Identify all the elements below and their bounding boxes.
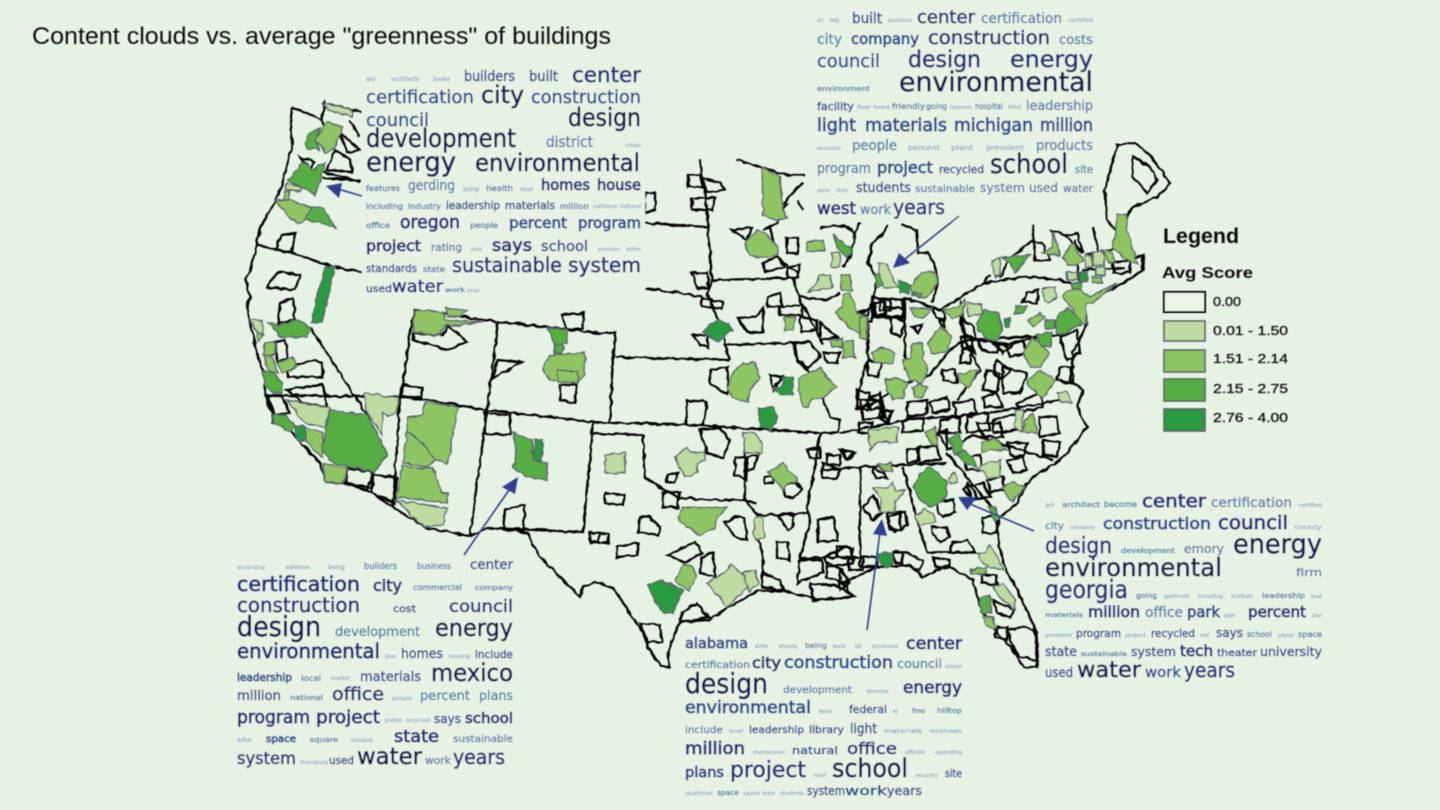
word cloud: Georgia: gwinnett (1164, 594, 1190, 600)
word cloud: Georgia: firm (1296, 566, 1322, 579)
word cloud: New Mexico: thornburg (300, 760, 328, 766)
word cloud: Michigan: construction (928, 27, 1050, 49)
word cloud: New Mexico: space (266, 734, 296, 745)
word cloud: Oregon: natural (620, 204, 641, 210)
word cloud: Alabama: city (752, 654, 781, 672)
word cloud: Georgia: company (1070, 525, 1095, 531)
word cloud: Michigan: years (893, 195, 945, 219)
word cloud: Oregon: says (492, 236, 532, 256)
word cloud: Alabama: being (805, 642, 827, 650)
word cloud: New Mexico: design (237, 610, 321, 643)
word cloud: Oregon: homes (541, 176, 590, 194)
word cloud: Oregon: going (463, 186, 479, 193)
word cloud: New Mexico: market (331, 676, 350, 682)
word cloud: Georgia: program (1076, 627, 1121, 640)
word cloud: Georgia: school (1247, 630, 1272, 639)
word cloud: Georgia: recycled (1151, 627, 1195, 640)
word cloud: Michigan: heaven (950, 105, 972, 111)
word cloud: Georgia: water (1077, 658, 1142, 683)
word cloud: Oregon: system (568, 253, 641, 277)
word cloud: Georgia: leadership (1262, 592, 1306, 600)
word cloud: Georgia: including (1198, 594, 1223, 600)
word cloud: Oregon: year (467, 288, 481, 294)
word cloud: Michigan: museum (817, 146, 841, 152)
word cloud: Oregon: office (366, 221, 390, 230)
word cloud: Oregon: construction (531, 87, 641, 108)
word cloud: Oregon: urban (625, 143, 641, 149)
word cloud: Oregon: certification (366, 87, 474, 108)
word cloud: New Mexico: work (425, 754, 452, 767)
word cloud: Georgia: years (1184, 658, 1235, 682)
word cloud: Alabama: development (783, 685, 852, 696)
word cloud: Oregon: materials (505, 199, 555, 212)
word cloud: Georgia: certification (1211, 496, 1292, 511)
word cloud: Georgia: skylar (1278, 633, 1296, 639)
word cloud: Michigan: certified (1068, 18, 1093, 24)
word cloud: Michigan: school (990, 149, 1068, 180)
word cloud: Michigan: council (817, 51, 880, 72)
word cloud: Georgia: work (1145, 665, 1182, 681)
word cloud: Michigan: light (817, 115, 856, 136)
word cloud: New Mexico: include (475, 648, 513, 661)
word cloud: Alabama: center (906, 634, 962, 654)
word cloud: Michigan: space (817, 188, 830, 194)
word cloud: Georgia: sustainable (1081, 651, 1127, 658)
word cloud: Oregon: district (546, 133, 593, 151)
word cloud: Oregon: heat (520, 187, 533, 193)
word cloud: New Mexico: commercial (413, 583, 462, 592)
word cloud: Alabama: director (866, 689, 890, 695)
word cloud: Alabama: construction (784, 653, 893, 673)
word cloud: Georgia: construction (1103, 514, 1211, 533)
arrow: Alabama cloud to Alabama (867, 519, 887, 630)
word cloud: New Mexico: national (290, 694, 323, 702)
word cloud: Michigan: floor (857, 105, 872, 111)
word cloud: Michigan: leadership (1026, 99, 1093, 114)
word cloud: Alabama: security (915, 773, 938, 779)
word cloud: Michigan: project (877, 158, 933, 177)
word cloud: New Mexico: energy (435, 614, 513, 642)
word cloud: Alabama: library (809, 725, 844, 736)
word cloud: New Mexico: used (329, 754, 354, 767)
word cloud: New Mexico (232, 556, 516, 772)
word cloud: Alabama: area (755, 643, 768, 650)
metro areas scored 2.76 - 4.00 (295, 267, 1087, 613)
word cloud: Michigan: art (817, 18, 824, 24)
word cloud: Alabama: council (897, 657, 942, 671)
unscored metro area outlines (0.00) (267, 133, 1157, 660)
word cloud: Alabama: montessori (753, 750, 785, 756)
word cloud: New Mexico: million (237, 689, 281, 704)
word cloud: Oregon: million (560, 202, 589, 211)
word cloud: Alabama: space (717, 789, 739, 797)
word cloud: Alabama: include (685, 725, 723, 736)
word cloud: Georgia: says (1216, 626, 1243, 640)
word cloud: Michigan: percent (908, 144, 940, 152)
word cloud: Georgia: theater (1217, 648, 1258, 659)
word cloud: Oregon: percent (509, 214, 567, 232)
word cloud: Michigan: company (851, 30, 919, 48)
word cloud: Alabama: design (685, 667, 768, 700)
word cloud: New Mexico: housing (449, 654, 470, 660)
word cloud: New Mexico: addition (285, 565, 310, 571)
word cloud: New Mexico: water (357, 744, 423, 770)
word cloud: Georgia: development (1121, 547, 1175, 555)
word cloud: Alabama: environmental (685, 698, 811, 718)
word cloud: Michigan: energy (1010, 47, 1093, 73)
word cloud: Michigan: water (1063, 182, 1093, 195)
word cloud: Georgia: university (1260, 645, 1322, 659)
word cloud: Oregon: environmental (475, 149, 640, 177)
word cloud: Michigan: inc (1008, 104, 1022, 111)
word cloud: Michigan: environmental (899, 67, 1093, 98)
word cloud: Georgia: energy (1233, 529, 1322, 560)
word cloud: New Mexico: council (449, 597, 513, 617)
word cloud: Oregon: water (392, 277, 443, 297)
word cloud: Alabama: business (872, 644, 898, 650)
word cloud: New Mexico: square (310, 736, 338, 744)
word cloud: Alabama: roof (813, 773, 826, 779)
word cloud: New Mexico: years (453, 745, 505, 769)
word cloud: Alabama: natural (792, 744, 838, 757)
word cloud: Georgia: used (1045, 666, 1073, 681)
word cloud: New Mexico: company (475, 584, 513, 592)
word cloud: Alabama: firms (912, 708, 925, 715)
word cloud: New Mexico: certification (237, 572, 360, 596)
legend: 1.51 - 2.14 (1213, 351, 1288, 366)
word cloud: Michigan: certification (981, 11, 1062, 27)
word cloud: Oregon: built (529, 69, 558, 85)
legend: Avg Score (1162, 265, 1253, 282)
word cloud: Michigan: environment (817, 85, 870, 93)
word cloud: Georgia: space (1298, 630, 1322, 639)
arrow: Oregon cloud to Portland (326, 183, 362, 198)
word cloud: New Mexico: materials (360, 670, 421, 685)
word cloud: Georgia: center (1142, 491, 1207, 512)
legend: 2.76 - 4.00 (1213, 410, 1288, 425)
word cloud: New Mexico: state (394, 727, 439, 747)
word cloud: Georgia: project (1125, 633, 1146, 639)
word cloud: Oregon: house (597, 176, 641, 194)
word cloud: Michigan: michigan (954, 115, 1033, 136)
word cloud: Alabama: million (685, 739, 745, 759)
word cloud: Alabama: state (762, 791, 775, 797)
word cloud: Georgia: materials (1045, 612, 1083, 619)
word cloud: Georgia: plan (1312, 613, 1322, 619)
word cloud: Michigan: business (888, 18, 912, 24)
word cloud: Oregon: national (593, 204, 617, 210)
word cloud: Oregon: work (445, 287, 466, 294)
word cloud: Oregon: architects (391, 76, 419, 83)
word cloud: Alabama: features (819, 709, 832, 715)
word cloud: Alabama: school (832, 754, 908, 784)
word cloud: New Mexico: according (237, 565, 265, 571)
word cloud: Oregon: health (486, 184, 513, 193)
word cloud: Michigan: west (817, 199, 856, 219)
word cloud: Georgia: design (1045, 534, 1112, 559)
word cloud: Oregon: books (433, 76, 450, 83)
word cloud: Oregon: including (366, 202, 403, 211)
word cloud: New Mexico: system (237, 749, 296, 769)
word cloud: Michigan: going (926, 102, 947, 111)
word cloud: Michigan: state (836, 188, 848, 194)
word cloud: Alabama: feet (893, 709, 898, 715)
title: Content clouds vs. average "greenness" of buildings (32, 23, 611, 50)
word cloud: New Mexico: school (465, 711, 513, 727)
word cloud: Georgia: state (1045, 645, 1077, 660)
word cloud: Alabama: energy (903, 678, 962, 698)
legend (1162, 225, 1288, 431)
word cloud: New Mexico: recycled (405, 718, 430, 724)
word cloud: New Mexico: plans (479, 689, 513, 704)
word cloud: Oregon: center (572, 63, 641, 87)
legend: 0.01 - 1.50 (1213, 323, 1288, 338)
word cloud: Oregon: energy (366, 147, 456, 178)
word cloud: New Mexico: development (335, 625, 420, 640)
word cloud: Michigan: work (860, 203, 891, 218)
word cloud: Michigan: people (852, 138, 897, 154)
word cloud: Oregon: people (470, 221, 498, 230)
word cloud: Oregon: used (366, 284, 392, 295)
choropleth map of US metro areas (245, 100, 1170, 668)
arrow: Georgia cloud to Georgia (958, 497, 1034, 531)
word cloud: Michigan: costs (1059, 33, 1093, 48)
word cloud: Alabama: hilltop (937, 707, 963, 715)
word cloud: Georgia: county (1294, 524, 1323, 531)
word cloud: Georgia: tech (1180, 642, 1213, 660)
word cloud: Michigan: forest (873, 105, 890, 111)
word cloud: Georgia: georgia (1045, 575, 1128, 604)
word cloud: Michigan: center (917, 7, 976, 28)
word cloud: Alabama: work (845, 784, 887, 798)
word cloud: Alabama: students (780, 791, 804, 797)
word cloud: Alabama: southtrust (685, 791, 713, 797)
word cloud: Alabama: light (850, 722, 877, 737)
word cloud: Oregon (362, 62, 645, 298)
word cloud: Michigan: being (830, 18, 839, 24)
metro areas scored 1.51 - 2.14 (257, 122, 1138, 628)
word cloud: Georgia: environmental (1045, 553, 1222, 582)
word cloud: Oregon: industry (408, 202, 441, 211)
word cloud: New Mexico: environmental (237, 639, 380, 663)
word cloud: New Mexico: public (385, 718, 402, 724)
word cloud: Oregon: city (481, 81, 524, 109)
word cloud: Michigan: million (1040, 115, 1093, 136)
word cloud: Georgia: air (1045, 502, 1056, 509)
word cloud: New Mexico: mexico (431, 659, 513, 687)
word cloud: Alabama: built (855, 644, 862, 650)
word cloud: Michigan: program (817, 161, 871, 177)
word cloud: Michigan: friendly (892, 102, 925, 111)
word cloud: Georgia: office (1145, 605, 1183, 621)
word cloud: New Mexico: standards (351, 738, 373, 744)
word cloud: New Mexico: project (316, 707, 380, 728)
word cloud: Georgia: become (1104, 500, 1137, 509)
legend: Legend (1163, 225, 1239, 248)
word cloud: Oregon: project (366, 237, 421, 255)
word cloud: Alabama: square (743, 791, 760, 797)
word cloud: New Mexico: homes (401, 647, 443, 662)
word cloud: New Mexico: percent (420, 689, 470, 704)
word cloud: Oregon: oregon (400, 212, 460, 233)
word cloud: Michigan: system (980, 181, 1025, 195)
word cloud: Michigan: students (856, 181, 911, 196)
word cloud: Michigan: products (1036, 138, 1093, 154)
word cloud: Alabama: alabama (685, 636, 748, 652)
word cloud: New Mexico: cost (393, 604, 416, 615)
word cloud: Georgia: park (1187, 603, 1220, 621)
word cloud: Oregon: state (423, 265, 445, 274)
word cloud: Alabama: officials (905, 750, 925, 756)
word cloud: Michigan: built (852, 11, 882, 27)
word cloud: Oregon: air (366, 76, 377, 83)
word cloud: Georgia (1042, 491, 1326, 686)
word cloud: Oregon: site (626, 247, 641, 253)
national outline and state borders (245, 100, 1170, 668)
word cloud: Michigan: recycled (939, 163, 984, 176)
word cloud: Alabama: atlanta (778, 644, 798, 650)
word cloud: Oregon: gerding (408, 178, 455, 194)
metro areas scored 2.15 - 2.75 (262, 128, 1082, 613)
word cloud: Oregon: features (366, 184, 400, 193)
word cloud: New Mexico: leadership (237, 671, 292, 684)
word cloud: Oregon: leadership (446, 199, 500, 212)
word cloud: New Mexico: office (332, 684, 384, 705)
word cloud: Georgia: percent (1248, 603, 1306, 621)
word cloud: Oregon: real (471, 247, 482, 253)
word cloud: New Mexico: glass (385, 654, 396, 660)
word cloud: Georgia: certified (1298, 503, 1322, 509)
word cloud: Georgia: president (1045, 633, 1072, 639)
word cloud: Alabama: board (833, 644, 845, 650)
legend: 2.15 - 2.75 (1213, 381, 1288, 396)
word cloud: New Mexico: business (417, 562, 451, 572)
word cloud: New Mexico: program (237, 707, 310, 728)
word cloud: Alabama: office (847, 739, 897, 758)
word cloud: Oregon: builders (464, 69, 515, 85)
word cloud: Alabama: mcelveen (929, 728, 962, 735)
word cloud: Michigan: materials (865, 115, 947, 136)
word cloud: Georgia: institute (1231, 594, 1253, 600)
word cloud: Michigan: sustainable (915, 184, 975, 195)
word cloud: New Mexico: site (237, 737, 252, 744)
word cloud: Michigan: plant (951, 144, 973, 152)
word cloud: Georgia: council (1218, 512, 1288, 534)
word cloud: Michigan: city (817, 32, 842, 48)
word cloud: Michigan: facility (817, 100, 854, 113)
arrow: Michigan cloud to Michigan (893, 216, 959, 268)
word cloud: New Mexico: local (301, 674, 321, 683)
metro areas scored 0.01 - 1.50 (250, 103, 1105, 610)
word cloud: Alabama: years (887, 784, 922, 798)
word cloud: Oregon: council (366, 110, 429, 131)
arrow: Mexico cloud to New Mexico (464, 477, 518, 555)
word cloud: Michigan: design (908, 47, 981, 73)
word cloud: Alabama: level (729, 729, 743, 735)
word cloud: New Mexico: center (470, 558, 514, 573)
word cloud: Michigan: president (986, 144, 1024, 152)
word cloud: Alabama: certification (685, 660, 750, 671)
word cloud: Alabama (682, 633, 965, 801)
word cloud: Oregon: development (366, 124, 516, 154)
word cloud: New Mexico: says (434, 712, 461, 726)
word cloud: Michigan: used (1029, 181, 1058, 195)
word cloud: Oregon: program (578, 214, 641, 232)
word cloud: New Mexico: construction (237, 593, 360, 617)
word cloud: Michigan: site (1075, 163, 1093, 176)
word cloud: Oregon: rating (431, 241, 462, 254)
word cloud: Alabama: plans (685, 765, 724, 781)
word cloud: New Mexico: builders (364, 562, 397, 572)
word cloud: Alabama: system (807, 784, 845, 798)
word cloud: Alabama: crayne (945, 664, 962, 670)
word cloud: Alabama: leadership (749, 725, 804, 736)
word cloud: Georgia: roof (1200, 633, 1209, 639)
word cloud: Oregon: standards (366, 262, 417, 275)
word cloud: Georgia: system (1131, 645, 1176, 659)
word cloud: Alabama: project (730, 758, 806, 783)
word cloud: Alabama: operating (935, 750, 962, 756)
word cloud: New Mexico: people (392, 696, 412, 702)
word cloud: Michigan: hospital (975, 102, 1003, 111)
word cloud: New Mexico: being (328, 564, 345, 571)
word cloud: Oregon: sustainable (452, 253, 562, 277)
word cloud: Georgia: going (1136, 592, 1157, 600)
word cloud: Alabama: site (945, 767, 962, 780)
word cloud: Oregon: design (568, 103, 641, 132)
word cloud: Michigan (808, 5, 1097, 222)
word cloud: Georgia: emory (1184, 542, 1224, 556)
word cloud: Oregon: services (598, 247, 620, 253)
legend: 0.00 (1213, 294, 1241, 309)
word cloud: Georgia: law (1311, 594, 1322, 600)
word cloud: Alabama: materials (884, 728, 922, 735)
word cloud: Georgia: million (1088, 603, 1140, 621)
word cloud: New Mexico: city (373, 576, 402, 595)
word cloud: Georgia: city (1045, 521, 1064, 532)
word cloud: Alabama: federal (849, 703, 887, 716)
word cloud: New Mexico: sustainable (453, 734, 513, 745)
word cloud: Oregon: school (541, 239, 588, 255)
word cloud: Georgia: architect (1062, 501, 1100, 509)
word cloud: Georgia: people (1224, 613, 1235, 619)
